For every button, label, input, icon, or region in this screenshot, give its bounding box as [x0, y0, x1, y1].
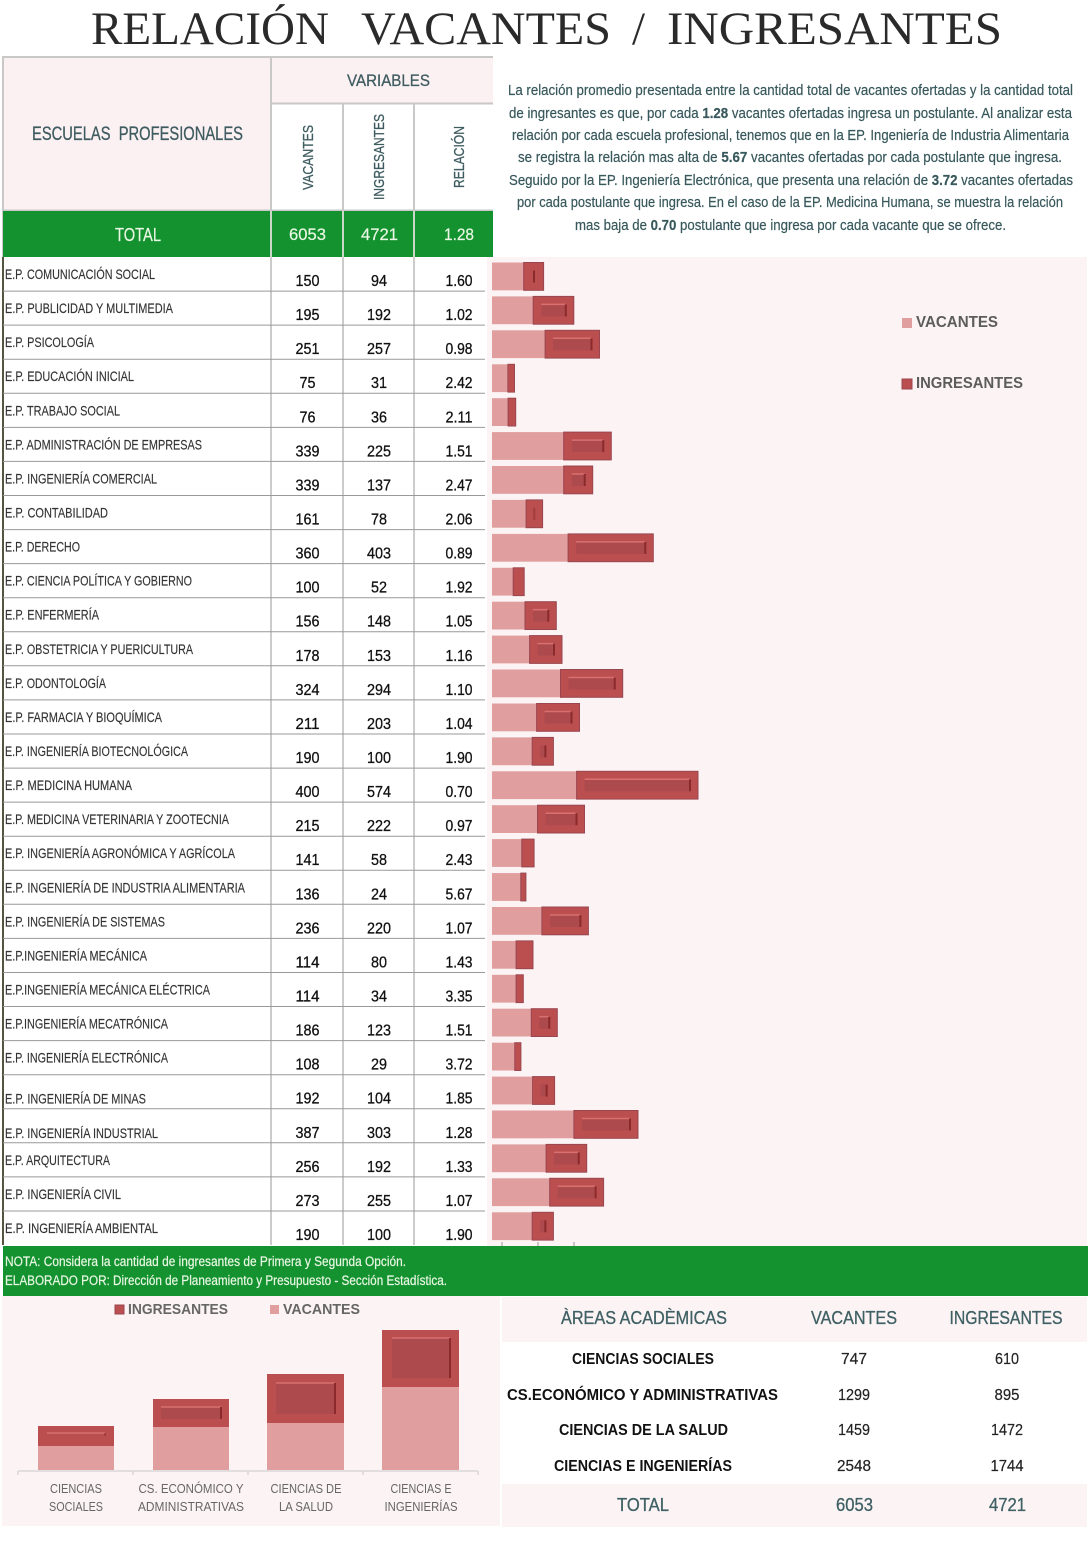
row: mecánica eléctrica: 3.35 — [446, 988, 473, 1006]
row: ambiental — [5, 1220, 473, 1244]
heading: variables: VARIABLES — [347, 71, 430, 90]
column: ciencias e ingenierías — [382, 1330, 459, 1514]
row: civil: 1.07 — [446, 1193, 473, 1210]
row: medicina veterinaria: 222 — [367, 818, 391, 835]
row: arquitectura: 192 — [367, 1159, 391, 1176]
row: publicidad: 195 — [296, 307, 320, 324]
row: económico y administrativas: CS.ECONÓMICO Y ADMINISTRATIVAS — [507, 1385, 778, 1404]
row: industrial: 1.28 — [446, 1125, 473, 1142]
row: enfermería: 1.05 — [446, 614, 473, 631]
row: civil: 255 — [367, 1193, 391, 1210]
bar: agronómica — [492, 839, 534, 867]
row: comunicación social: 94 — [371, 273, 387, 290]
bar: arquitectura — [492, 1144, 587, 1172]
row: agronómica: 58 — [371, 852, 387, 869]
row: ingeniería comercial: 2.47 — [446, 477, 473, 494]
row: comunicación social: E.P. COMUNICACIÓN SOCIAL — [5, 266, 155, 282]
row: publicidad: 1.02 — [446, 307, 473, 324]
row: mecánica: 80 — [371, 954, 387, 971]
row: electrónica: 108 — [296, 1057, 320, 1074]
row: industria alimentaria: E.P. INGENIERÍA DE INDUSTRIA ALIMENTARIA — [5, 879, 246, 895]
row: minas: 192 — [296, 1091, 320, 1108]
note band — [3, 1246, 1088, 1296]
row: enfermería — [5, 607, 473, 631]
bar: medicina veterinaria — [492, 805, 584, 833]
row: económico y administrativas: 1299 — [838, 1387, 870, 1404]
column: ciencias sociales: CIENCIAS — [50, 1481, 102, 1496]
bar: farmacia — [492, 704, 580, 731]
bar: biotecnológica — [492, 737, 553, 765]
row: mecatrónica: 186 — [296, 1022, 320, 1040]
bar: derecho — [492, 534, 653, 562]
row: publicidad: 192 — [367, 307, 391, 324]
bar: mecatrónica — [492, 1009, 557, 1036]
total row: 4721 — [361, 225, 398, 244]
row: comunicación social: 150 — [296, 273, 320, 290]
row: mecánica — [5, 947, 473, 971]
row: minas: E.P. INGENIERÍA DE MINAS — [5, 1091, 146, 1107]
row: industrial: 303 — [367, 1125, 391, 1142]
row: publicidad — [5, 300, 473, 324]
column: económico y administrativas: ADMINISTRATIVAS — [138, 1499, 244, 1514]
row: agronómica: E.P. INGENIERÍA AGRONÓMICA Y AGRÍCOLA — [5, 845, 236, 861]
row: industria alimentaria — [5, 879, 473, 903]
row: ciencias e ingenierías — [554, 1456, 1024, 1475]
heading: escuelas profesionales: ESCUELAS PROFESIONALES — [32, 124, 243, 145]
row: mecánica eléctrica: 34 — [371, 988, 387, 1006]
row: ciencia política: 1.92 — [446, 580, 473, 597]
row: derecho — [5, 539, 473, 563]
row: civil — [5, 1186, 473, 1210]
heading: relación: RELACIÓN — [451, 126, 468, 188]
row: mecatrónica: E.P.INGENIERÍA MECATRÓNICA — [5, 1016, 169, 1032]
row: obstetricia: E.P. OBSTETRICIA Y PUERICULTURA — [5, 641, 194, 657]
row: medicina veterinaria — [5, 811, 473, 835]
row: medicina humana: E.P. MEDICINA HUMANA — [5, 777, 133, 793]
bar: mecánica eléctrica — [492, 975, 523, 1003]
title: RELACIÓN — [91, 3, 329, 55]
bar: odontología — [492, 670, 623, 697]
row: medicina veterinaria: E.P. MEDICINA VETERINARIA Y ZOOTECNIA — [5, 811, 230, 827]
row: psicología: 0.98 — [446, 341, 473, 358]
row: contabilidad: 2.06 — [446, 512, 473, 528]
heading: vacantes: VACANTES — [300, 125, 317, 190]
table total row: TOTAL — [617, 1495, 669, 1515]
bar: contabilidad — [492, 500, 543, 528]
table total row: 6053 — [836, 1495, 873, 1515]
table header — [2, 57, 493, 257]
heading: ingresantes: INGRESANTES — [371, 114, 388, 200]
row: biotecnológica: 190 — [296, 750, 320, 767]
row: arquitectura — [5, 1152, 473, 1176]
row: psicología — [5, 334, 473, 358]
bar: electrónica — [492, 1043, 521, 1070]
row: biotecnológica: 1.90 — [446, 750, 473, 767]
row: ciencias de la salud: 1472 — [991, 1422, 1023, 1439]
bar: minas — [492, 1077, 555, 1104]
column chart legend: VACANTES — [283, 1301, 360, 1318]
row: industria alimentaria: 24 — [371, 886, 387, 903]
title: INGRESANTES — [667, 3, 1002, 55]
bar chart legend: INGRESANTES — [916, 375, 1023, 392]
bar: ciencia política — [492, 568, 524, 596]
row: medicina veterinaria: 215 — [296, 818, 320, 835]
row: odontología: 324 — [296, 682, 320, 699]
row: ambiental: E.P. INGENIERÍA AMBIENTAL — [5, 1220, 158, 1236]
bar chart legend — [902, 314, 1023, 392]
row: sistemas: E.P. INGENIERÍA DE SISTEMAS — [5, 913, 165, 929]
title — [91, 3, 1002, 55]
row: farmacia: 1.04 — [446, 716, 473, 733]
column: ciencias de la salud — [267, 1374, 344, 1514]
bar: medicina humana — [492, 771, 698, 799]
total row — [3, 211, 493, 257]
bar: administración de empresas — [492, 432, 611, 460]
bar: comunicación social — [492, 262, 544, 290]
row: obstetricia: 1.16 — [446, 648, 473, 665]
bar: ambiental — [492, 1212, 553, 1240]
description paragraph: se registra la relación mas alta de 5.67 vacantes ofertadas por cada postulante que ingresa. — [518, 149, 1062, 166]
bar: obstetricia — [492, 636, 562, 663]
total row: TOTAL — [115, 225, 161, 245]
row: industria alimentaria: 136 — [296, 886, 320, 903]
bar: trabajo social — [492, 398, 516, 426]
row: agronómica: 2.43 — [446, 852, 473, 869]
row: odontología: 1.10 — [446, 682, 473, 699]
row: ciencias de la salud — [559, 1422, 1023, 1439]
title: VACANTES — [361, 3, 611, 55]
bar: civil — [492, 1178, 604, 1206]
row: medicina humana: 574 — [367, 784, 391, 801]
row: civil: E.P. INGENIERÍA CIVIL — [5, 1186, 121, 1202]
table header row: ÀREAS ACADÈMICAS — [561, 1308, 727, 1328]
row: agronómica: 141 — [296, 852, 320, 869]
row: ambiental: 190 — [296, 1227, 320, 1244]
row: enfermería: 148 — [367, 614, 391, 631]
row: farmacia — [5, 709, 473, 733]
row: ciencia política: 52 — [371, 580, 387, 597]
row: derecho: 0.89 — [446, 546, 473, 563]
row: ciencias sociales: 747 — [841, 1351, 867, 1368]
row: obstetricia — [5, 641, 473, 665]
column: ciencias e ingenierías: INGENIERÍAS — [384, 1499, 458, 1514]
row: biotecnológica — [5, 743, 473, 767]
row: administración de empresas: 1.51 — [446, 443, 473, 460]
row: mecatrónica: 123 — [367, 1022, 391, 1040]
row: educación inicial: 75 — [300, 375, 316, 392]
row: mecánica eléctrica: E.P.INGENIERÍA MECÁNICA ELÉCTRICA — [5, 982, 211, 998]
row: educación inicial: 2.42 — [446, 375, 473, 392]
row: enfermería: E.P. ENFERMERÍA — [5, 607, 100, 623]
note band: ELABORADO POR: Dirección de Planeamiento y Presupuesto - Sección Estadística. — [5, 1273, 447, 1288]
row: educación inicial: E.P. EDUCACIÓN INICIAL — [5, 368, 134, 384]
row: electrónica: 29 — [371, 1057, 387, 1074]
row: ciencias sociales: 610 — [995, 1351, 1019, 1368]
row: trabajo social: 36 — [371, 409, 387, 426]
row: derecho: 360 — [296, 546, 320, 563]
bar: psicología — [492, 330, 600, 358]
bar: industrial — [492, 1110, 638, 1138]
column chart legend: INGRESANTES — [128, 1301, 228, 1318]
row: sistemas: 1.07 — [446, 920, 473, 937]
row: arquitectura: E.P. ARQUITECTURA — [5, 1152, 111, 1168]
note band: NOTA: Considera la cantidad de ingresantes de Primera y Segunda Opción. — [5, 1254, 406, 1269]
row: odontología: E.P. ODONTOLOGÍA — [5, 675, 106, 691]
row: electrónica — [5, 1050, 473, 1074]
row: psicología: 257 — [367, 341, 391, 358]
row: ingeniería comercial: 137 — [367, 477, 391, 494]
bar: enfermería — [492, 602, 556, 630]
row: ciencia política — [5, 573, 473, 597]
row: contabilidad: E.P. CONTABILIDAD — [5, 504, 108, 520]
column: ciencias de la salud: LA SALUD — [279, 1499, 333, 1514]
row: sistemas: 220 — [367, 920, 391, 937]
row: arquitectura: 256 — [296, 1159, 320, 1176]
row: mecánica eléctrica: 114 — [296, 988, 320, 1006]
row: obstetricia: 153 — [367, 648, 391, 665]
column chart legend — [115, 1301, 360, 1318]
row: medicina humana — [5, 777, 473, 801]
row: administración de empresas: E.P. ADMINISTRACIÓN DE EMPRESAS — [5, 436, 202, 452]
row: ciencia política: 100 — [296, 580, 320, 597]
row: electrónica: E.P. INGENIERÍA ELECTRÓNICA — [5, 1050, 169, 1066]
row: administración de empresas — [5, 436, 473, 460]
row: farmacia: E.P. FARMACIA Y BIOQUÍMICA — [5, 709, 163, 725]
row: minas: 1.85 — [446, 1091, 473, 1108]
column: ciencias sociales — [38, 1426, 114, 1514]
row: sistemas: 236 — [296, 920, 320, 937]
row: ciencias e ingenierías: CIENCIAS E INGENIERÍAS — [554, 1456, 732, 1475]
row: contabilidad: 78 — [371, 512, 387, 528]
row: minas — [5, 1091, 473, 1108]
description paragraph: mas baja de 0.70 postulante que ingresa por cada vacante que se ofrece. — [575, 217, 1006, 234]
row: ingeniería comercial — [5, 470, 473, 494]
column: económico y administrativas — [138, 1399, 244, 1514]
bar: ingeniería comercial — [492, 466, 593, 494]
row: trabajo social: 2.11 — [446, 409, 473, 426]
table total row — [617, 1495, 1026, 1515]
row: civil: 273 — [296, 1193, 320, 1210]
row: ciencias de la salud: CIENCIAS DE LA SALUD — [559, 1422, 728, 1439]
table grid — [2, 257, 4, 1245]
row: farmacia: 203 — [367, 716, 391, 733]
row: ciencias de la salud: 1459 — [838, 1422, 870, 1439]
row: contabilidad — [5, 504, 473, 528]
row: agronómica — [5, 845, 473, 869]
row: trabajo social: E.P. TRABAJO SOCIAL — [5, 402, 120, 418]
row: publicidad: E.P. PUBLICIDAD Y MULTIMEDIA — [5, 300, 174, 316]
row: trabajo social — [5, 402, 473, 426]
row: trabajo social: 76 — [300, 409, 316, 426]
row: ciencias sociales: CIENCIAS SOCIALES — [572, 1351, 714, 1368]
row: contabilidad: 161 — [296, 512, 320, 528]
column: ciencias de la salud: CIENCIAS DE — [270, 1481, 342, 1496]
row: biotecnológica: 100 — [367, 750, 391, 767]
table total row: 4721 — [989, 1495, 1026, 1515]
row: biotecnológica: E.P. INGENIERÍA BIOTECNOLÓGICA — [5, 743, 188, 759]
column: ciencias e ingenierías: CIENCIAS E — [390, 1481, 452, 1496]
column: ciencias sociales: SOCIALES — [49, 1499, 103, 1514]
row: sistemas — [5, 913, 473, 937]
row: comunicación social: 1.60 — [446, 273, 473, 290]
row: ingeniería comercial: E.P. INGENIERÍA COMERCIAL — [5, 470, 157, 486]
row: derecho: 403 — [367, 546, 391, 563]
row: farmacia: 211 — [296, 716, 320, 733]
row: mecatrónica — [5, 1016, 473, 1040]
bar: industria alimentaria — [492, 873, 526, 901]
row: ciencias e ingenierías: 1744 — [990, 1458, 1024, 1475]
row: económico y administrativas — [507, 1385, 1020, 1404]
bar chart legend: VACANTES — [916, 314, 998, 331]
table header row: INGRESANTES — [950, 1308, 1062, 1328]
row: económico y administrativas: 895 — [994, 1387, 1020, 1404]
row: educación inicial: 31 — [371, 375, 387, 392]
row: mecánica: 1.43 — [446, 954, 473, 971]
row: mecánica: 114 — [296, 954, 320, 971]
row: ambiental: 100 — [367, 1227, 391, 1244]
table header row — [561, 1308, 1062, 1328]
row: medicina veterinaria: 0.97 — [446, 818, 473, 835]
row: odontología — [5, 675, 473, 699]
row: medicina humana: 0.70 — [446, 784, 473, 801]
panel: áreas académicas table — [502, 1297, 1087, 1527]
row: arquitectura: 1.33 — [446, 1159, 473, 1176]
total row: 1.28 — [444, 225, 474, 244]
row: minas: 104 — [367, 1091, 391, 1108]
row: ciencia política: E.P. CIENCIA POLÍTICA Y GOBIERNO — [5, 573, 192, 589]
description paragraph: Seguido por la EP. Ingeniería Electrónica, que presenta una relación de 3.72 vacantes ofertadas — [509, 172, 1073, 189]
panel: stacked column chart — [2, 1296, 500, 1526]
row: industria alimentaria: 5.67 — [446, 886, 473, 903]
row: derecho: E.P. DERECHO — [5, 539, 80, 555]
row: psicología: E.P. PSICOLOGÍA — [5, 334, 95, 350]
title: / — [632, 3, 646, 55]
row: psicología: 251 — [296, 341, 320, 358]
bar: mecánica — [492, 941, 533, 969]
row: electrónica: 3.72 — [446, 1057, 473, 1074]
row: ingeniería comercial: 339 — [296, 477, 320, 494]
bar: sistemas — [492, 907, 588, 935]
table header row: VACANTES — [811, 1308, 897, 1328]
row: odontología: 294 — [367, 682, 391, 699]
row: mecatrónica: 1.51 — [446, 1022, 473, 1040]
row: industrial — [5, 1125, 473, 1142]
row: ciencias sociales — [572, 1351, 1019, 1368]
description paragraph — [508, 82, 1073, 234]
row: comunicación social — [5, 266, 473, 290]
chart background — [487, 257, 1087, 1246]
column: económico y administrativas: CS. ECONÓMICO Y — [138, 1481, 244, 1496]
horizontal bar chart — [492, 262, 698, 1240]
row: industrial: 387 — [296, 1125, 320, 1142]
row: medicina humana: 400 — [296, 784, 320, 801]
row: mecánica: E.P.INGENIERÍA MECÁNICA — [5, 947, 148, 963]
row: mecánica eléctrica — [5, 982, 473, 1006]
bar: educación inicial — [492, 364, 514, 392]
total row: 6053 — [289, 225, 326, 244]
row: administración de empresas: 339 — [296, 443, 320, 460]
row: ciencias e ingenierías: 2548 — [837, 1458, 871, 1475]
row: industrial: E.P. INGENIERÍA INDUSTRIAL — [5, 1125, 158, 1141]
bar: publicidad — [492, 296, 574, 324]
row: enfermería: 156 — [296, 614, 320, 631]
row: administración de empresas: 225 — [367, 443, 391, 460]
row: educación inicial — [5, 368, 473, 392]
row: ambiental: 1.90 — [446, 1227, 473, 1244]
table rows — [5, 266, 473, 1244]
row: obstetricia: 178 — [296, 648, 320, 665]
